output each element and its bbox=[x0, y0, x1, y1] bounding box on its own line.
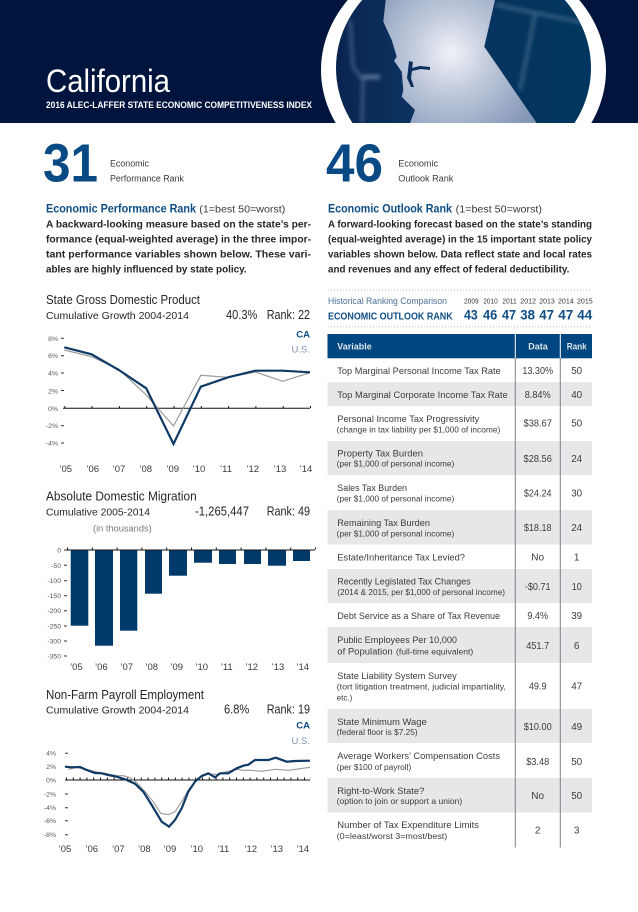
row: corporate income tax: Top Marginal Corporate Income Tax Rate bbox=[337, 390, 508, 401]
line chart: GDP growth: 6% bbox=[48, 353, 58, 360]
rank number 31: 31 bbox=[43, 134, 98, 194]
line chart: payroll growth: ’11 bbox=[217, 844, 229, 855]
line chart: GDP growth: ’06 bbox=[86, 464, 99, 475]
row: public employees: Public Employees Per 10,000 bbox=[337, 635, 457, 646]
heading bbox=[46, 204, 285, 216]
panel: economic performance rank bbox=[43, 134, 311, 276]
row: workers compensation: $3.48 bbox=[526, 757, 550, 768]
table: policy variables bbox=[328, 334, 592, 848]
chart heading: (in thousands) bbox=[93, 524, 152, 534]
rank caption: Performance Rank bbox=[110, 174, 184, 184]
line chart: payroll growth bbox=[44, 720, 311, 855]
description: (equal-weighted average) in the 15 important state policy bbox=[328, 234, 592, 246]
description bbox=[328, 219, 592, 276]
description bbox=[46, 219, 311, 276]
line chart: GDP growth: -2% bbox=[46, 423, 58, 430]
row: minimum wage: $10.00 bbox=[524, 722, 552, 733]
description: tant performance variables shown below. These vari- bbox=[46, 249, 311, 261]
rank caption: Economic bbox=[398, 159, 439, 169]
line chart: GDP growth: U.S. bbox=[292, 345, 310, 356]
line chart: GDP growth: ’07 bbox=[113, 464, 125, 475]
row: right to work: Right-to-Work State? bbox=[337, 786, 424, 797]
row: liability survey: State Liability System Survey bbox=[337, 671, 457, 682]
row: remaining tax: 24 bbox=[571, 523, 583, 534]
line chart: payroll growth: ’14 bbox=[296, 844, 309, 855]
row: debt service: Debt Service as a Share of Tax Revenue bbox=[337, 611, 500, 622]
line chart: GDP growth: ’13 bbox=[274, 464, 286, 475]
row: sales tax: Sales Tax Burden bbox=[337, 483, 407, 494]
row: public employees: 451.7 bbox=[526, 641, 550, 652]
panel: domestic migration bbox=[46, 490, 316, 673]
row: expenditure limits: 2 bbox=[535, 826, 541, 837]
panel: historical ranking comparison: 47 bbox=[502, 307, 516, 323]
panel: historical ranking comparison: 2011 bbox=[502, 296, 517, 305]
row: workers compensation: (per $100 of payroll) bbox=[337, 763, 412, 772]
line chart: payroll growth: ’13 bbox=[270, 844, 283, 855]
panel: historical ranking comparison bbox=[328, 296, 593, 323]
panel: state GDP bbox=[46, 293, 312, 475]
rank caption: Economic bbox=[110, 159, 149, 169]
row: liability survey: 49.9 bbox=[529, 682, 547, 693]
line chart: payroll growth: 4% bbox=[46, 751, 56, 758]
bar chart: migration: -150 bbox=[47, 593, 61, 600]
line chart: GDP growth: ’08 bbox=[139, 464, 152, 475]
line chart: GDP growth bbox=[46, 330, 312, 475]
bar chart: migration: ’08 bbox=[145, 662, 158, 673]
row: personal income tax: Top Marginal Personal Income Tax Rate bbox=[337, 366, 501, 377]
line chart: payroll growth: U.S. bbox=[292, 736, 310, 747]
row: public employees bbox=[337, 635, 580, 658]
row: right to work: (option to join or support a union) bbox=[337, 797, 463, 806]
bar chart: migration bbox=[47, 548, 316, 673]
row: debt service: 9.4% bbox=[527, 611, 548, 622]
line chart: GDP growth: ’09 bbox=[166, 464, 179, 475]
bar chart: migration: ’05 bbox=[70, 662, 83, 673]
row: recent tax changes: Recently Legislated Tax Changes bbox=[337, 577, 471, 588]
chart heading: 40.3% bbox=[226, 307, 258, 322]
panel: historical ranking comparison: 2014 bbox=[558, 296, 574, 305]
chart heading: 6.8% bbox=[224, 701, 250, 716]
line chart: payroll growth: -6% bbox=[44, 818, 56, 825]
line chart: GDP growth: ’05 bbox=[59, 464, 72, 475]
description: A backward-looking measure based on the state’s per- bbox=[46, 219, 311, 231]
row: estate tax: Estate/Inheritance Tax Levied? bbox=[337, 553, 465, 564]
line chart: payroll growth: ’09 bbox=[164, 844, 176, 855]
chart heading bbox=[46, 688, 310, 716]
bar chart: migration: ’09 bbox=[170, 662, 183, 673]
line chart: GDP growth: -4% bbox=[46, 441, 58, 448]
title: California bbox=[46, 63, 170, 99]
row: right to work: 50 bbox=[571, 791, 583, 802]
table header: Data bbox=[528, 341, 548, 352]
table header bbox=[328, 334, 592, 358]
bar chart: migration: ’12 bbox=[245, 662, 258, 673]
row: remaining tax: (per $1,000 of personal income) bbox=[337, 530, 455, 539]
row: estate tax: No bbox=[531, 553, 545, 564]
rank caption: Outlook Rank bbox=[398, 174, 454, 184]
line chart: GDP growth: ’11 bbox=[220, 464, 232, 475]
chart heading: Cumulative Growth 2004-2014 bbox=[46, 704, 189, 716]
row: property tax: 24 bbox=[571, 454, 583, 465]
bar chart: migration: ’13 bbox=[272, 662, 284, 673]
icon: California map in ring bbox=[321, 0, 606, 123]
line chart: GDP growth: 4% bbox=[48, 371, 58, 378]
panel: historical ranking comparison: 2012 bbox=[520, 296, 536, 305]
panel: historical ranking comparison: ECONOMIC OUTLOOK RANK bbox=[328, 311, 453, 322]
row: personal income tax: 50 bbox=[571, 366, 583, 377]
bar chart: migration: ’11 bbox=[221, 662, 233, 673]
line chart: GDP growth: ’14 bbox=[300, 464, 312, 475]
row: progressivity: $38.67 bbox=[524, 419, 552, 430]
line chart: GDP growth: CA bbox=[296, 330, 310, 341]
row: estate tax bbox=[337, 553, 580, 564]
row: recent tax changes: 10 bbox=[572, 582, 582, 593]
line chart: payroll growth: CA bbox=[296, 720, 310, 731]
row: progressivity bbox=[337, 414, 583, 435]
line chart: payroll growth: ’06 bbox=[85, 844, 98, 855]
bar chart: migration: ’14 bbox=[296, 662, 309, 673]
row: corporate income tax: 40 bbox=[571, 390, 583, 401]
row: property tax: (per $1,000 of personal income) bbox=[337, 460, 455, 469]
row: progressivity: (change in tax liability per $1,000 of income) bbox=[337, 426, 501, 435]
table header: Variable bbox=[337, 341, 372, 352]
panel: historical ranking comparison: 47 bbox=[539, 307, 554, 323]
row: sales tax: (per $1,000 of personal income) bbox=[337, 495, 455, 504]
panel: historical ranking comparison: 43 bbox=[464, 307, 478, 323]
row: workers compensation bbox=[337, 751, 583, 772]
heading: Economic Performance Rank bbox=[46, 204, 197, 216]
line chart: payroll growth: -2% bbox=[44, 791, 56, 798]
panel: historical ranking comparison: 38 bbox=[520, 307, 535, 323]
description: and revenues and any effect of federal deductibility. bbox=[328, 264, 569, 276]
row: personal income tax bbox=[337, 366, 583, 377]
row: expenditure limits: 3 bbox=[574, 826, 580, 837]
heading: Economic Outlook Rank bbox=[328, 204, 453, 216]
heading bbox=[328, 204, 542, 216]
panel: payroll employment bbox=[44, 688, 311, 855]
row: expenditure limits bbox=[337, 820, 580, 841]
bar chart: migration: ’10 bbox=[195, 662, 208, 673]
bar chart: migration: -250 bbox=[47, 624, 61, 630]
line chart: payroll growth: -8% bbox=[44, 832, 56, 839]
row: recent tax changes: (2014 & 2015, per $1,000 of personal income) bbox=[337, 588, 505, 597]
chart heading bbox=[46, 293, 310, 322]
row: minimum wage bbox=[337, 717, 583, 737]
row: recent tax changes: -$0.71 bbox=[525, 582, 551, 593]
row: liability survey: (tort litigation treatment, judicial impartiality, bbox=[337, 683, 506, 692]
row: sales tax bbox=[337, 483, 583, 504]
rank number 46: 46 bbox=[326, 134, 383, 194]
bar chart: migration: -50 bbox=[51, 563, 61, 570]
description: formance (equal-weighted average) in the three impor- bbox=[46, 234, 311, 246]
row: personal income tax: 13.30% bbox=[522, 366, 553, 377]
row: remaining tax: $18.18 bbox=[524, 523, 552, 534]
rank caption bbox=[398, 159, 454, 184]
row: corporate income tax: 8.84% bbox=[525, 390, 551, 401]
bar chart: migration: -100 bbox=[47, 578, 61, 585]
line chart: GDP growth: ’12 bbox=[246, 464, 259, 475]
row: public employees: 6 bbox=[574, 641, 580, 652]
row: liability survey: 47 bbox=[571, 682, 583, 693]
panel: historical ranking comparison: 2015 bbox=[577, 296, 593, 305]
description: variables shown below. Data reflect state and local rates bbox=[328, 249, 592, 261]
heading: (1=best 50=worst) bbox=[456, 205, 542, 216]
row: progressivity: 50 bbox=[571, 419, 583, 430]
chart heading: Rank: 19 bbox=[267, 701, 310, 716]
bar chart: migration: -350 bbox=[47, 654, 61, 660]
row: minimum wage: 49 bbox=[571, 722, 583, 733]
row: workers compensation: 50 bbox=[571, 757, 583, 768]
row: progressivity: Personal Income Tax Progressivity bbox=[337, 414, 480, 425]
row: sales tax: $24.24 bbox=[524, 489, 552, 500]
line chart: payroll growth: ’05 bbox=[59, 844, 71, 855]
row: property tax: Property Tax Burden bbox=[337, 449, 423, 460]
panel: economic outlook rank bbox=[326, 134, 592, 276]
row: expenditure limits: Number of Tax Expenditure Limits bbox=[337, 820, 479, 831]
chart heading: Rank: 49 bbox=[267, 504, 310, 519]
bar chart: migration: -300 bbox=[47, 638, 61, 646]
line chart: payroll growth: ’08 bbox=[138, 844, 151, 855]
row: sales tax: 30 bbox=[571, 489, 583, 500]
row: liability survey: etc.) bbox=[337, 694, 353, 703]
description: ables are highly influenced by state policy. bbox=[46, 264, 247, 276]
header banner bbox=[0, 0, 638, 123]
row: recent tax changes bbox=[337, 577, 582, 597]
row: remaining tax: Remaining Tax Burden bbox=[337, 518, 430, 529]
row: right to work bbox=[337, 786, 583, 806]
table header: Rank bbox=[567, 341, 587, 352]
line chart: GDP growth: 0% bbox=[48, 406, 58, 413]
row: minimum wage: (federal floor is $7.25) bbox=[337, 728, 418, 737]
row: debt service bbox=[337, 611, 583, 622]
line chart: payroll growth: -4% bbox=[44, 805, 56, 812]
description: A forward-looking forecast based on the state’s standing bbox=[328, 219, 592, 231]
chart heading: Absolute Domestic Migration bbox=[46, 490, 197, 504]
line chart: GDP growth: 8% bbox=[48, 336, 58, 343]
panel: historical ranking comparison: Historical Ranking Comparison bbox=[328, 296, 447, 307]
line chart: payroll growth: 2% bbox=[46, 764, 56, 771]
chart heading: State Gross Domestic Product bbox=[46, 293, 200, 307]
row: property tax bbox=[337, 449, 583, 469]
line chart: payroll growth: ’10 bbox=[190, 844, 203, 855]
row: minimum wage: State Minimum Wage bbox=[337, 717, 427, 728]
bar chart: migration: 0 bbox=[57, 548, 61, 554]
row: debt service: 39 bbox=[571, 611, 583, 622]
row: property tax: $28.56 bbox=[524, 454, 552, 465]
chart heading bbox=[46, 490, 310, 534]
chart heading: Cumulative Growth 2004-2014 bbox=[46, 310, 189, 322]
row: right to work: No bbox=[531, 791, 545, 802]
panel: historical ranking comparison: 2010 bbox=[483, 296, 498, 305]
line chart: payroll growth: ’12 bbox=[244, 844, 257, 855]
chart heading: Rank: 22 bbox=[267, 307, 310, 322]
chart heading: Cumulative 2005-2014 bbox=[46, 507, 150, 519]
bar chart: migration: -200 bbox=[47, 608, 61, 615]
chart heading: -1,265,447 bbox=[195, 504, 249, 519]
row: expenditure limits: (0=least/worst 3=most/best) bbox=[337, 832, 448, 841]
panel: historical ranking comparison: 2013 bbox=[539, 296, 555, 305]
line chart: GDP growth: ’10 bbox=[193, 464, 205, 475]
row: estate tax: 1 bbox=[574, 553, 580, 564]
panel: historical ranking comparison: 47 bbox=[558, 307, 574, 323]
subtitle: 2016 ALEC-LAFFER STATE ECONOMIC COMPETITIVENESS INDEX bbox=[46, 100, 313, 111]
row: liability survey bbox=[337, 671, 583, 703]
line chart: payroll growth: 0% bbox=[46, 778, 56, 785]
panel: historical ranking comparison: 2009 bbox=[464, 296, 479, 305]
rank caption bbox=[110, 159, 184, 184]
panel: historical ranking comparison: 46 bbox=[483, 307, 497, 323]
row: public employees: (full-time equivalent) bbox=[396, 648, 474, 657]
row: workers compensation: Average Workers’ Compensation Costs bbox=[337, 751, 500, 762]
chart heading: Non-Farm Payroll Employment bbox=[46, 688, 204, 702]
row: public employees: of Population bbox=[337, 647, 393, 658]
line chart: payroll growth: ’07 bbox=[112, 844, 125, 855]
bar chart: migration: ’07 bbox=[120, 662, 133, 673]
bar chart: migration: ’06 bbox=[95, 662, 108, 673]
panel: historical ranking comparison: 44 bbox=[577, 307, 593, 323]
heading: (1=best 50=worst) bbox=[199, 205, 285, 216]
line chart: GDP growth: 2% bbox=[48, 388, 58, 395]
row: remaining tax bbox=[337, 518, 583, 539]
